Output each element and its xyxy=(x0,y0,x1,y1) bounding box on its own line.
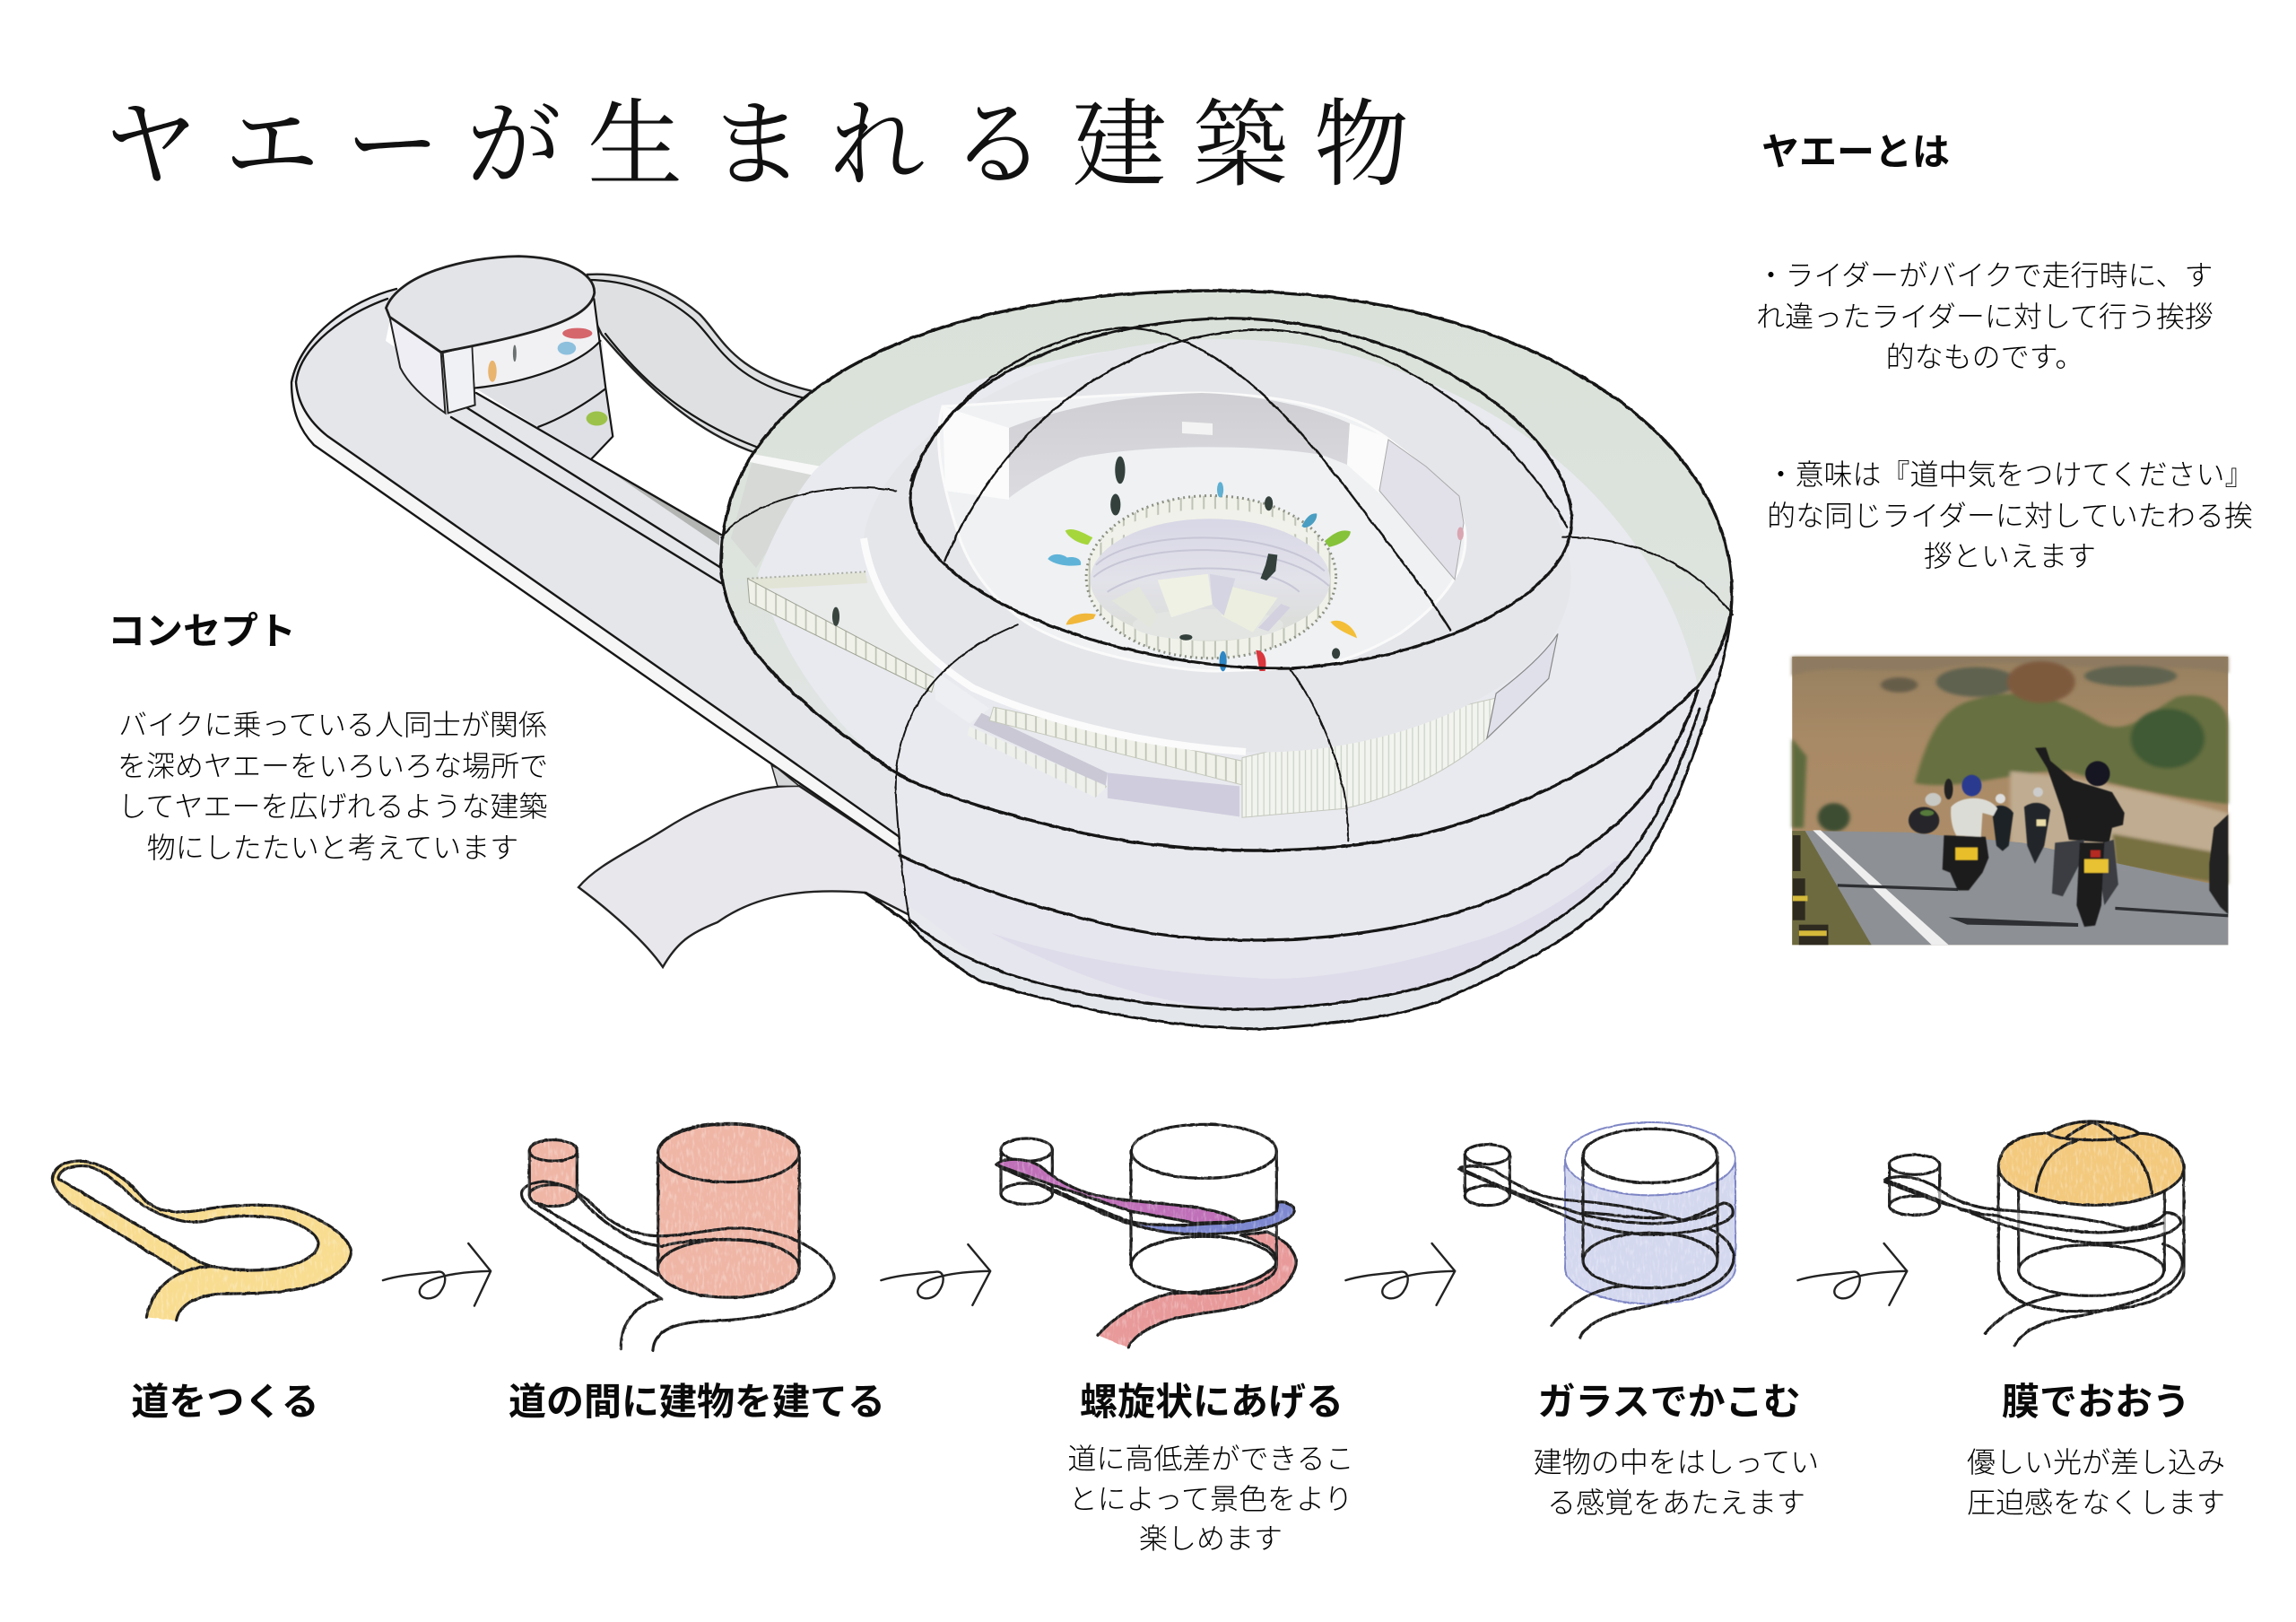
step 1 sketch: road xyxy=(52,1161,352,1321)
text block: yaeh meaning: 拶といえます xyxy=(1924,540,2096,572)
step 2 label: 道の間に建物を建てる xyxy=(509,1381,885,1423)
road outline xyxy=(522,1182,834,1350)
photo guard posts xyxy=(1793,835,1828,945)
step 4 description xyxy=(1534,1446,1819,1518)
black membrane and glass sketch lines xyxy=(721,291,1732,1029)
stair and window details xyxy=(747,571,1344,817)
small cylinder tower xyxy=(386,257,613,458)
text block: concept xyxy=(117,709,548,863)
big cylinder bottom ellipse xyxy=(658,1240,799,1269)
outer glass top outline xyxy=(721,291,1732,850)
lower deck disc xyxy=(758,341,1698,850)
dome seam lines xyxy=(2036,1122,2152,1193)
photo riders xyxy=(1909,747,2228,927)
fluted well rim xyxy=(1086,496,1336,658)
blue spiral road xyxy=(996,1164,1294,1234)
text block: yaeh definition xyxy=(1756,259,2213,373)
orange membrane dome xyxy=(1998,1121,2184,1205)
central well and courtyard figures xyxy=(1048,457,1464,671)
text block: yaeh meaning: ・意味は『道中気をつけてください』 xyxy=(1766,458,2254,491)
courtyard wall block xyxy=(1182,422,1213,435)
photo white road line xyxy=(1813,830,1949,945)
text block: yaeh meaning xyxy=(1766,458,2254,572)
slab outline strokes xyxy=(291,289,900,852)
arrow 3 xyxy=(1345,1243,1455,1305)
road ribbon outline xyxy=(1459,1166,1733,1234)
right window xyxy=(1379,440,1464,580)
lower road lines xyxy=(1552,1229,1734,1338)
right white column xyxy=(1347,423,1388,493)
step 4 sketch: glass enclosure xyxy=(1459,1122,1735,1338)
left white column xyxy=(943,406,1009,500)
courtyard floor opening xyxy=(938,393,1465,671)
glass top opening xyxy=(1565,1122,1735,1195)
photo hillside background xyxy=(1792,657,2228,945)
photo shadows xyxy=(1838,884,2228,927)
glass tube xyxy=(1565,1122,1735,1304)
glass roof top xyxy=(721,291,1732,850)
text block: concept: バイクに乗っている人同士が関係 xyxy=(118,709,547,741)
right edge rider xyxy=(2209,815,2228,914)
back road ribbon xyxy=(587,275,813,453)
step 5 description xyxy=(1967,1446,2225,1518)
left road slab xyxy=(291,289,906,852)
base silhouette line xyxy=(865,594,1732,1029)
colored rider silhouettes xyxy=(1048,482,1464,671)
courtyard back wall xyxy=(1009,393,1350,498)
white strip left xyxy=(750,454,822,475)
text block: concept: 物にしたたいと考えています xyxy=(147,831,518,863)
road inner lines xyxy=(539,1193,773,1275)
step 3 description: とによって景色をより xyxy=(1069,1482,1352,1514)
text block: concept: してヤエーを広げれるような建築 xyxy=(117,790,548,823)
lower band line xyxy=(909,709,1700,1009)
step 5 label: 膜でおおう xyxy=(2002,1381,2190,1423)
text block: yaeh definition: ・ライダーがバイクで走行時に、す xyxy=(1756,259,2213,292)
step 5 description: 圧迫感をなくします xyxy=(1967,1486,2225,1518)
slab light front edge xyxy=(291,382,900,852)
text block: yaeh definition: 的なものです。 xyxy=(1886,341,2083,373)
lower road lines xyxy=(1985,1244,2182,1345)
small cylinder xyxy=(1465,1145,1509,1206)
upper ring deck xyxy=(864,339,1571,752)
pink small cylinder xyxy=(529,1140,577,1207)
photo road surface xyxy=(1805,831,2228,945)
step 1 label: 道をつくる xyxy=(131,1381,319,1423)
road ribbon outline xyxy=(1885,1177,2181,1243)
well stairs xyxy=(1112,574,1291,632)
step 5 sketch: membrane cover xyxy=(1885,1121,2184,1345)
body inner lines xyxy=(2019,1190,2164,1270)
arrow 4 xyxy=(1797,1243,1907,1305)
text block: concept: を深めヤエーをいろいろな場所で xyxy=(117,750,548,782)
text block: yaeh definition: れ違ったライダーに対して行う挨拶 xyxy=(1756,300,2213,332)
big cylinder bottom ellipse xyxy=(1131,1236,1276,1294)
small cylinder xyxy=(1890,1155,1940,1216)
step 3 description: 道に高低差ができるこ xyxy=(1067,1443,1354,1475)
step 3 label: 螺旋状にあげる xyxy=(1080,1381,1344,1423)
roof ring and meridians xyxy=(721,318,1732,926)
small cylinder xyxy=(1001,1138,1052,1204)
slab gray channel xyxy=(538,427,719,545)
well floor xyxy=(1133,609,1283,641)
ring white edge xyxy=(864,538,1246,752)
big cylinder top ellipse xyxy=(658,1124,799,1182)
back ribbon double lines xyxy=(587,280,809,447)
middle rider xyxy=(1943,775,1997,890)
middle band line xyxy=(900,691,1698,940)
glass interior shade left xyxy=(731,460,820,568)
big cylinder top ellipse xyxy=(1131,1124,1276,1178)
tower rider figures xyxy=(488,328,607,425)
step 2 sketch: building between roads xyxy=(522,1123,834,1350)
step 3 description: 楽しめます xyxy=(1139,1522,1283,1555)
arrow 2 xyxy=(881,1244,990,1305)
heading: concept: コンセプト xyxy=(108,610,296,652)
step 4 label: ガラスでかこむ xyxy=(1537,1381,1801,1423)
road center lines xyxy=(1462,1169,1718,1224)
step 5 description: 優しい光が差し込み xyxy=(1967,1446,2225,1478)
road center line xyxy=(1885,1182,2163,1233)
main model: building with road and membrane xyxy=(291,257,1732,1029)
heading: what is yaeh: ヤエーとは xyxy=(1761,131,1950,173)
well top lip xyxy=(1098,509,1322,544)
pink big cylinder xyxy=(658,1123,799,1297)
photo trees and hills xyxy=(1792,657,2228,885)
inner cylinder xyxy=(1583,1129,1718,1288)
well layered walls xyxy=(1093,537,1329,592)
tower roof xyxy=(386,257,595,353)
lavender lower band xyxy=(900,691,1698,1009)
front ramp road xyxy=(578,786,909,967)
waving rider xyxy=(2035,747,2125,927)
text block: yaeh meaning: 的な同じライダーに対していたわる挨 xyxy=(1767,499,2253,531)
body outer lines xyxy=(1998,1169,2184,1312)
small cylinder ellipse lines xyxy=(529,1151,577,1195)
step 3 description xyxy=(1067,1443,1354,1555)
person figures xyxy=(1110,457,1340,658)
photo: riders waving on a road xyxy=(1792,657,2228,945)
arrow 1 xyxy=(383,1243,491,1306)
louvered wall and right panel xyxy=(1242,633,1558,817)
big cylinder sides xyxy=(1131,1151,1276,1265)
title: ヤエーが生まれる建築物 xyxy=(103,93,1435,198)
building body xyxy=(893,594,1732,1029)
magenta upper road xyxy=(996,1159,1240,1223)
pink lower road xyxy=(1098,1232,1296,1347)
step 3 sketch: spiral road xyxy=(996,1124,1296,1347)
photo roadside xyxy=(1792,831,1872,945)
step 4 description: る感覚をあたえます xyxy=(1547,1486,1805,1518)
bottom ellipse xyxy=(2019,1245,2164,1295)
well opening xyxy=(1091,519,1330,641)
distant riders xyxy=(1909,788,2050,864)
step 4 description: 建物の中をはしってい xyxy=(1534,1446,1819,1478)
